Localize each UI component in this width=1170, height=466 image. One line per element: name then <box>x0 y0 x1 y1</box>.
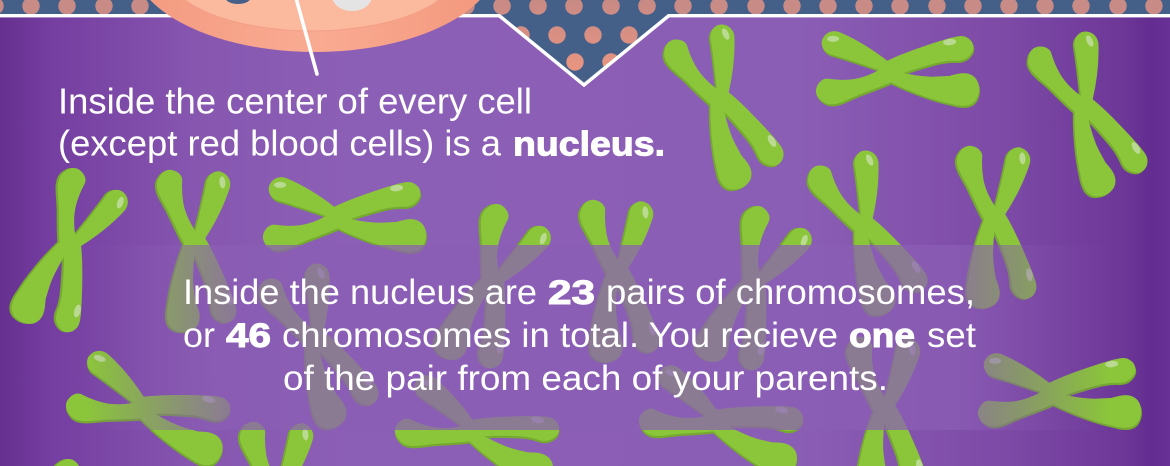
chromosome 10 <box>259 265 377 429</box>
chromosome 5 <box>911 130 1078 324</box>
chromosome 17 <box>624 326 824 466</box>
chromosome 14 <box>194 406 361 466</box>
chromosome count text: 23 <box>548 274 595 312</box>
chromosome count text: set <box>927 315 976 355</box>
nucleus caption: (except red blood cells) is a <box>58 122 502 164</box>
chromosome 11 <box>534 184 701 378</box>
chromosome count text: pairs of chromosomes, <box>606 272 975 312</box>
chromosome 16 <box>380 336 580 466</box>
chromosome 15 <box>0 444 161 466</box>
chromosome count text <box>183 272 976 398</box>
chromosome count text: chromosomes in total. You recieve <box>282 315 838 355</box>
chromosome 7 <box>111 154 278 348</box>
chromosome 18 <box>801 321 968 466</box>
chromosome 4 <box>808 152 926 316</box>
chromosome 2 <box>800 0 998 160</box>
patterned triangular notch <box>493 0 669 87</box>
chromosome 9 <box>390 189 589 388</box>
chromosome count text: of the pair from each of your parents. <box>283 358 888 398</box>
chromosome 13 <box>51 312 251 466</box>
chromosome 12 <box>651 191 850 390</box>
translucent text veil <box>85 245 1110 430</box>
top patterned band <box>0 0 1170 17</box>
nucleus caption: Inside the center of every cell <box>58 80 532 122</box>
nucleus caption <box>58 80 665 164</box>
chromosome count text: one <box>849 317 915 355</box>
chromosome count text: 46 <box>226 317 271 355</box>
nucleus caption: nucleus. <box>513 126 665 164</box>
chromosome count text: Inside the nucleus are <box>183 272 537 312</box>
chromosome 19 <box>962 306 1160 466</box>
cell illustration <box>132 0 498 52</box>
chromosome 6 <box>0 153 166 352</box>
pointer line to nucleus <box>296 0 317 74</box>
chromosome 1 <box>664 26 782 190</box>
chromosome 8 <box>247 130 445 306</box>
chromosome 3 <box>1028 33 1146 197</box>
chromosome count text: or <box>183 315 215 355</box>
